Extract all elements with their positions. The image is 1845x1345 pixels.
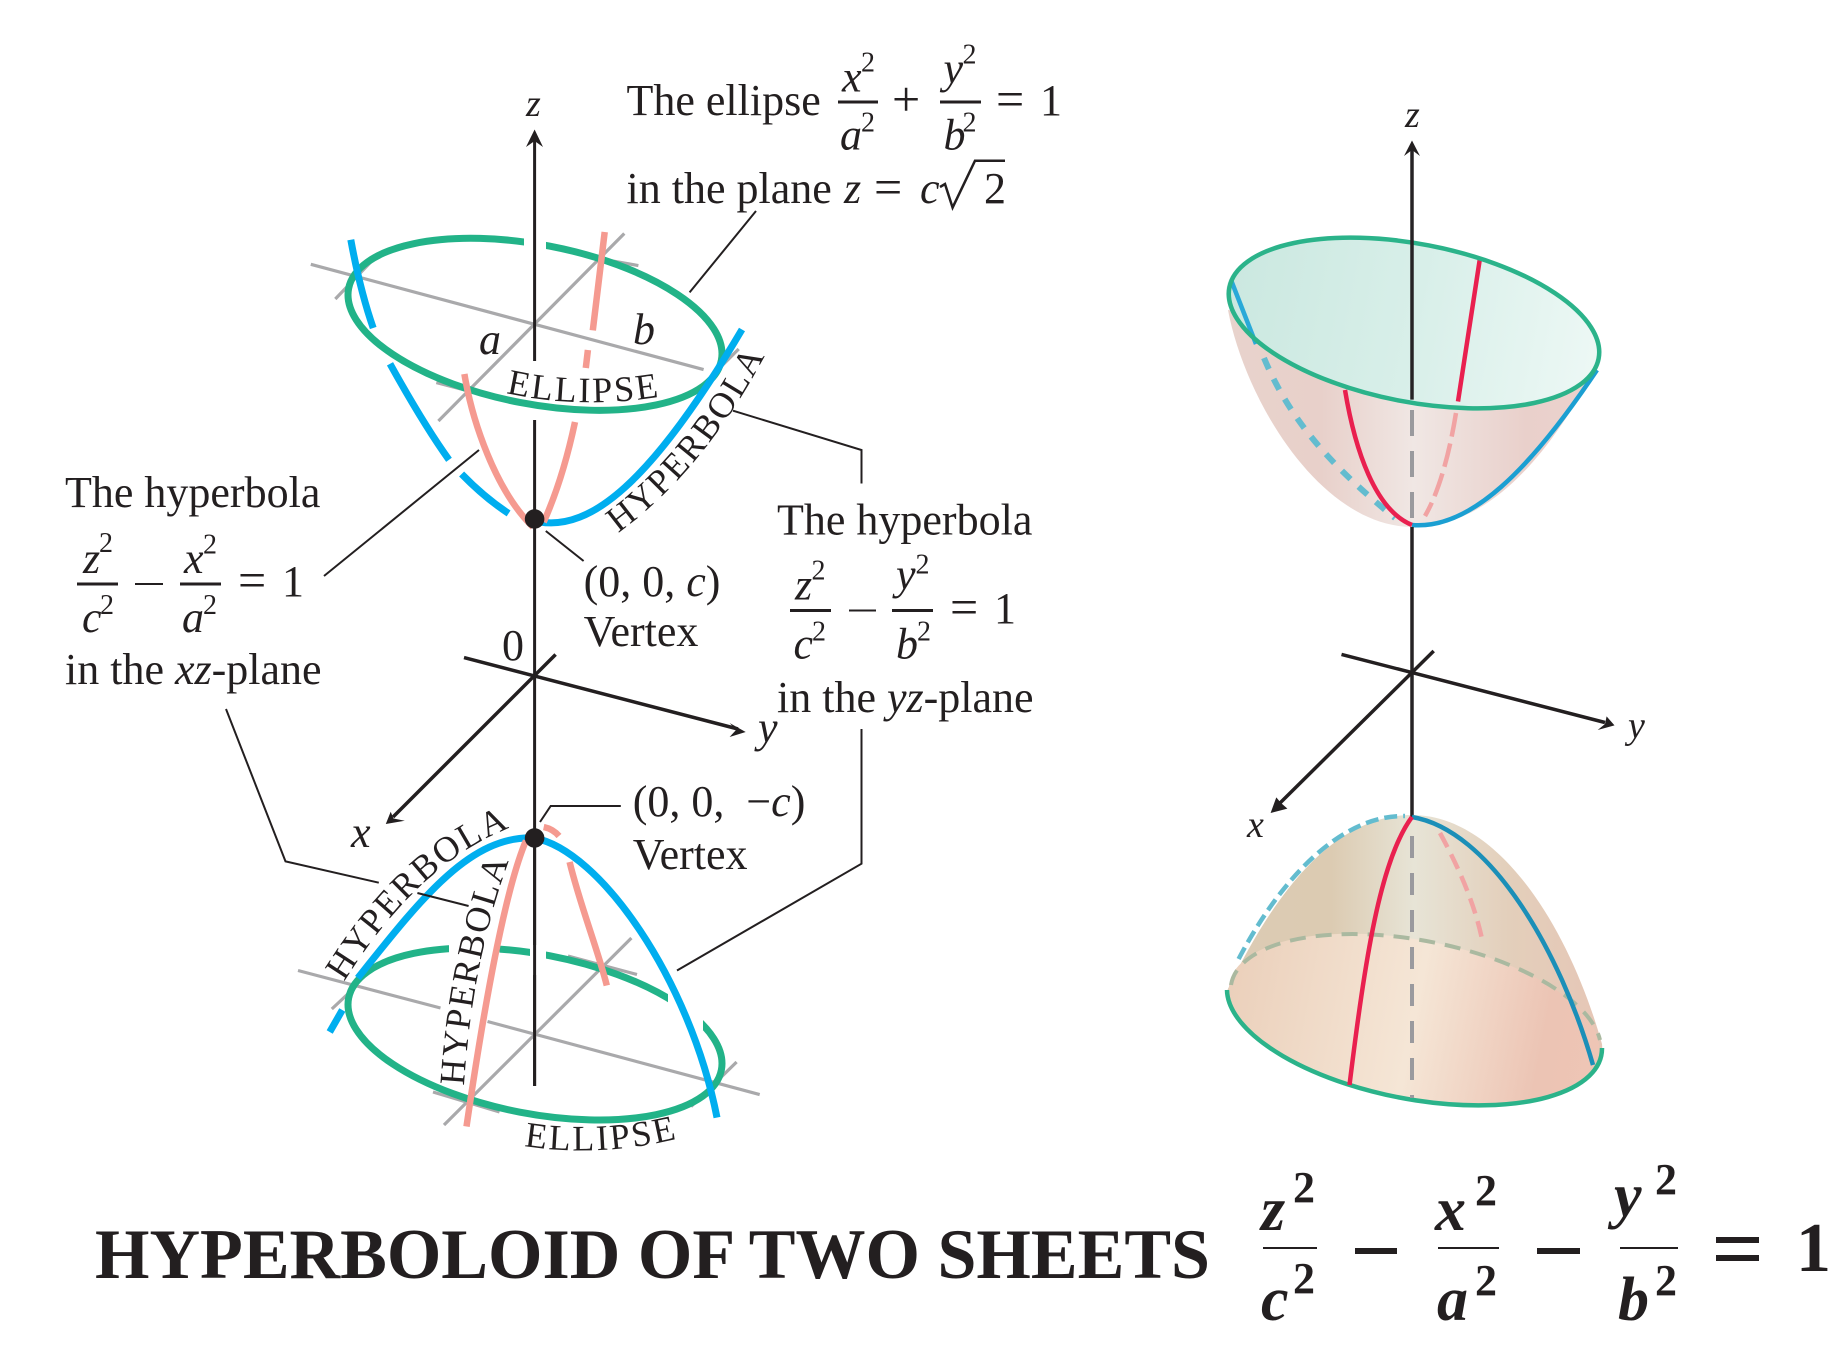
fraction x squared over a squared: 2 — [861, 48, 875, 78]
fraction y squared over b squared: 2 — [1655, 1256, 1677, 1305]
fraction x squared over a squared: 2 — [1475, 1256, 1497, 1305]
fraction z squared over c squared: c — [1261, 1266, 1289, 1334]
callout: lower vertex: (0, 0, −c) — [633, 777, 805, 826]
lower sheet dome surface — [1226, 815, 1602, 1105]
fraction z squared over c squared: z — [82, 534, 100, 583]
lower vertex dot — [525, 828, 544, 848]
fraction y squared over b squared: b — [896, 620, 918, 668]
fraction y squared over b squared: b — [944, 110, 966, 160]
fraction x squared over a squared: x — [841, 52, 862, 102]
upper ellipse — [334, 210, 736, 438]
y axis — [464, 658, 746, 737]
label: origin 0: 0 — [502, 621, 524, 670]
title: HYPERBOLOID OF TWO SHEETS — [95, 1216, 1210, 1294]
fraction x squared over a squared: x — [1434, 1176, 1466, 1244]
callout: the ellipse: c — [920, 164, 940, 213]
callout: the ellipse: in the plane — [626, 164, 832, 213]
fraction y squared over b squared: y — [1607, 1162, 1642, 1230]
upper sheet rim — [1214, 210, 1614, 436]
upper sheet opening — [1212, 208, 1616, 438]
callout: hyperbola in the xz-plane: 1 — [282, 557, 304, 606]
fraction z squared over c squared: c — [82, 593, 102, 642]
fraction x squared over a squared — [1434, 1166, 1499, 1334]
fraction y squared over b squared: 2 — [916, 550, 930, 580]
leader lines — [226, 211, 862, 970]
axis z with dashes — [1404, 140, 1420, 1098]
label: y: y — [754, 703, 778, 752]
callout: the ellipse — [626, 40, 1062, 215]
label: z: z — [525, 83, 541, 125]
lower ellipse — [334, 920, 736, 1148]
callout: the ellipse: + — [892, 71, 920, 127]
fraction x squared over a squared: 2 — [861, 108, 875, 138]
right x axis — [1271, 651, 1434, 813]
right label: z: z — [1404, 94, 1420, 136]
fraction x squared over a squared: 2 — [203, 590, 217, 621]
upper sheet surface — [1228, 310, 1600, 527]
fraction z squared over c squared — [790, 556, 831, 668]
fraction y squared over b squared — [892, 550, 933, 668]
z axis — [526, 130, 543, 1086]
callout: the ellipse: = — [996, 71, 1024, 127]
upper vertex dot — [525, 509, 544, 529]
callout: hyperbola in the xz-plane: The hyperbola — [65, 468, 320, 517]
fraction z squared over c squared: 2 — [99, 528, 113, 559]
fraction z squared over c squared: 2 — [100, 590, 114, 621]
label: b: b — [633, 305, 655, 354]
upper sheet red hyperbola — [1345, 258, 1480, 525]
fraction x squared over a squared: a — [182, 593, 204, 642]
callout: the ellipse: 1 — [1040, 76, 1062, 125]
fraction z squared over c squared: 2 — [1293, 1254, 1315, 1303]
right y axis — [1342, 654, 1614, 730]
curved label: upper ellipse: ELLIPSE — [507, 370, 657, 402]
fraction x squared over a squared: a — [840, 110, 862, 160]
minus sign — [1537, 1248, 1580, 1254]
curved label: lower ellipse: ELLIPSE — [525, 1116, 675, 1150]
fraction z squared over c squared: 2 — [1293, 1163, 1315, 1212]
callout: upper vertex — [584, 557, 720, 656]
fraction x squared over a squared: x — [183, 534, 204, 583]
lower hyperbola in the xz-plane — [466, 827, 607, 1126]
callout: hyperbola in the yz-plane — [777, 496, 1034, 722]
fraction y squared over b squared: 2 — [917, 616, 931, 648]
lower sheet back rim dashed — [1231, 934, 1600, 1040]
right diagram: shaded hyperboloid — [1212, 94, 1645, 1132]
callout: hyperbola in the yz-plane: 1 — [994, 584, 1016, 633]
fraction x squared over a squared — [838, 48, 878, 160]
curved label: lower outer hyperbola: HYPERBOLA — [324, 810, 510, 981]
right label: x: x — [1246, 804, 1264, 846]
callout: upper vertex: Vertex — [584, 607, 698, 656]
label: x: x — [350, 808, 371, 857]
fraction z squared over c squared: 2 — [812, 616, 826, 648]
callout: hyperbola in the yz-plane: in the yz-plane — [777, 673, 1034, 722]
curved label: upper hyperbola: HYPERBOLA — [604, 354, 765, 533]
fraction z squared over c squared: c — [794, 620, 814, 668]
callout: lower vertex: Vertex — [633, 830, 748, 879]
upper sheet reference axes — [311, 234, 739, 421]
main equation — [1259, 1155, 1831, 1334]
fraction y squared over b squared: 2 — [962, 40, 976, 70]
upper hyperbola in the xz-plane — [464, 232, 605, 527]
right label: y: y — [1624, 705, 1645, 747]
callout: the ellipse: z — [843, 164, 861, 213]
callout: hyperbola in the xz-plane: = — [238, 552, 266, 608]
fraction z squared over c squared: 2 — [812, 556, 826, 586]
fraction z squared over c squared: z — [1259, 1176, 1285, 1244]
fraction x squared over a squared: 2 — [1475, 1166, 1497, 1215]
label: a: a — [479, 315, 501, 364]
lower sheet front rim — [1227, 990, 1602, 1105]
callout: the ellipse: = — [874, 159, 902, 215]
fraction y squared over b squared: b — [1618, 1266, 1649, 1334]
callout: the ellipse: 2 — [984, 164, 1006, 213]
lower hyperbola in the yz-plane — [330, 838, 717, 1118]
callout: lower vertex — [633, 777, 805, 879]
lower sheet base — [1214, 906, 1614, 1132]
fraction z squared over c squared — [1259, 1163, 1317, 1334]
lower z axis segment redraw — [533, 830, 536, 1086]
fraction x squared over a squared: 2 — [203, 530, 217, 560]
callout: the ellipse: The ellipse — [626, 76, 821, 125]
lower sheet reference axes — [298, 938, 760, 1125]
callout: hyperbola in the yz-plane: The hyperbola — [777, 496, 1032, 544]
x axis — [386, 654, 556, 824]
callout: hyperbola in the yz-plane: = — [950, 579, 978, 635]
left diagram: wireframe hyperboloid — [225, 83, 862, 1150]
curved label: lower inner hyperbola: HYPERBOLA — [440, 860, 509, 1085]
lower sheet red hyperbola — [1350, 817, 1482, 1085]
fraction y squared over b squared: 2 — [1655, 1155, 1677, 1204]
callout: upper vertex: (0, 0, c) — [584, 557, 720, 606]
equals sign — [1716, 1237, 1759, 1261]
fraction z squared over c squared: z — [794, 560, 812, 610]
callout: hyperbola in the xz-plane — [65, 468, 322, 694]
fraction y squared over b squared: y — [940, 44, 964, 93]
callout: hyperbola in the xz-plane: in the xz-plane — [65, 645, 322, 694]
fraction x squared over a squared: a — [1437, 1266, 1468, 1334]
upper sheet blue hyperbola — [1231, 280, 1597, 525]
fraction y squared over b squared — [940, 40, 981, 160]
fraction x squared over a squared — [180, 530, 221, 642]
fraction y squared over b squared: 2 — [962, 108, 976, 138]
fraction z squared over c squared — [77, 528, 118, 642]
fraction y squared over b squared — [1607, 1155, 1678, 1334]
lower sheet blue hyperbola — [1239, 816, 1593, 1065]
minus sign — [1355, 1248, 1397, 1254]
fraction y squared over b squared: y — [892, 550, 916, 599]
one: 1 — [1796, 1210, 1831, 1287]
upper hyperbola in the yz-plane — [351, 240, 742, 523]
